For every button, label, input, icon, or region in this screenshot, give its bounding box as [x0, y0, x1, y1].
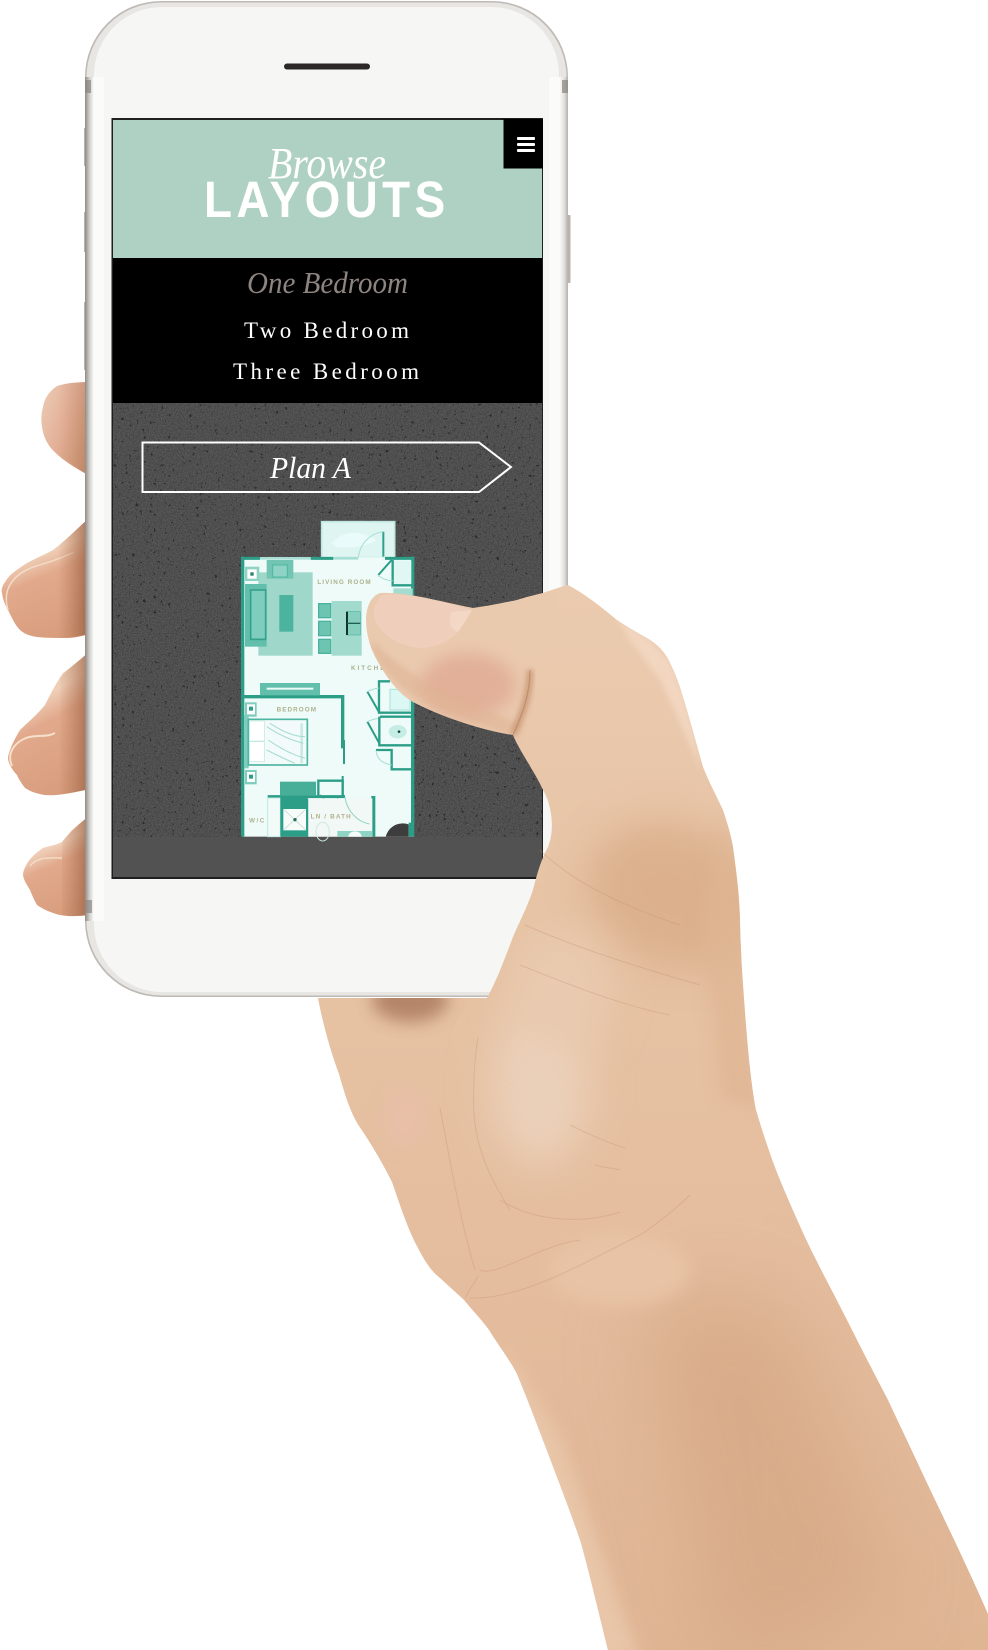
stools [319, 604, 331, 653]
palm pink [383, 1088, 427, 1148]
bedroom columns [245, 702, 257, 784]
phone [84, 1, 570, 997]
skin shading [366, 590, 900, 1650]
finger 1 [41, 382, 90, 476]
hand silhouette [318, 585, 988, 1650]
phone left edge shading [85, 77, 105, 921]
apartment floor [242, 557, 414, 837]
menu item Two Bedroom: Two Bedroom [244, 318, 409, 343]
rug [258, 572, 313, 656]
skin creases [440, 850, 700, 1298]
room label living room: LIVING ROOM [317, 579, 371, 586]
room label w/c: W/C [249, 817, 265, 824]
speaker [284, 64, 370, 70]
knuckle highlight [622, 624, 699, 758]
entry wall [409, 823, 411, 837]
palm shadow below phone [364, 998, 456, 1030]
wardrobe [280, 782, 316, 796]
phone body [85, 1, 568, 997]
menu item Three Bedroom: Three Bedroom [233, 359, 419, 384]
dresser [260, 683, 320, 695]
concrete plan panel [113, 403, 542, 837]
coffee table [279, 595, 293, 632]
phone face [94, 7, 559, 992]
forearm shadow [646, 1286, 869, 1635]
antenna bands [85, 80, 568, 913]
thumb crease shadow [513, 670, 530, 735]
header background [113, 120, 542, 258]
back fingers [2, 382, 90, 916]
right bezel highlight [549, 77, 559, 607]
edge shade of palm right [713, 928, 756, 1106]
closet upper right [378, 560, 413, 602]
balcony [322, 522, 395, 558]
header panel [113, 119, 543, 258]
column top left [245, 567, 259, 581]
sofa [245, 584, 267, 647]
bed [244, 715, 307, 768]
phone rim [86, 2, 566, 996]
finger 3 [8, 651, 90, 795]
mound lower [519, 939, 606, 1014]
bedroom menu [113, 258, 542, 403]
menu background [113, 258, 542, 403]
thumb underside shade [372, 644, 513, 734]
forearm light edge [515, 1370, 637, 1650]
walls [241, 557, 414, 837]
heading LAYOUTS: LAYOUTS [204, 172, 445, 229]
left bezel highlight [94, 77, 104, 921]
linen closet [318, 776, 343, 807]
bathroom closets right [367, 681, 413, 769]
armchair [267, 560, 293, 579]
hand [318, 585, 988, 1650]
thenar light [490, 1005, 590, 1165]
room label kitchen: KITCHEN [351, 665, 391, 672]
phone side buttons [84, 128, 570, 370]
nail [374, 594, 472, 648]
menu item One Bedroom: One Bedroom [247, 265, 408, 300]
app screen [112, 118, 543, 879]
kitchen island [332, 601, 362, 656]
thumb pink [420, 653, 516, 717]
dark band across palm [578, 813, 741, 974]
plan A arrow label [142, 442, 511, 492]
menu button [504, 119, 543, 168]
plan A arrow label: Plan A [269, 450, 352, 485]
bathroom [268, 797, 373, 841]
phone right edge shading [548, 77, 568, 607]
thumb fill [366, 593, 542, 735]
finger 2 [2, 517, 90, 638]
room label bedroom: BEDROOM [277, 706, 316, 713]
screen frame [112, 118, 543, 879]
room label ln / bath: LN / BATH [311, 814, 351, 821]
entry door cut-out [386, 823, 409, 837]
wrist mid tone [573, 1250, 685, 1302]
bottom band [113, 837, 542, 877]
heading Browse: Browse [268, 139, 386, 188]
floor plan [241, 522, 420, 858]
wash basin [389, 725, 407, 738]
nail moon [450, 610, 472, 632]
finger 4 [23, 815, 90, 916]
